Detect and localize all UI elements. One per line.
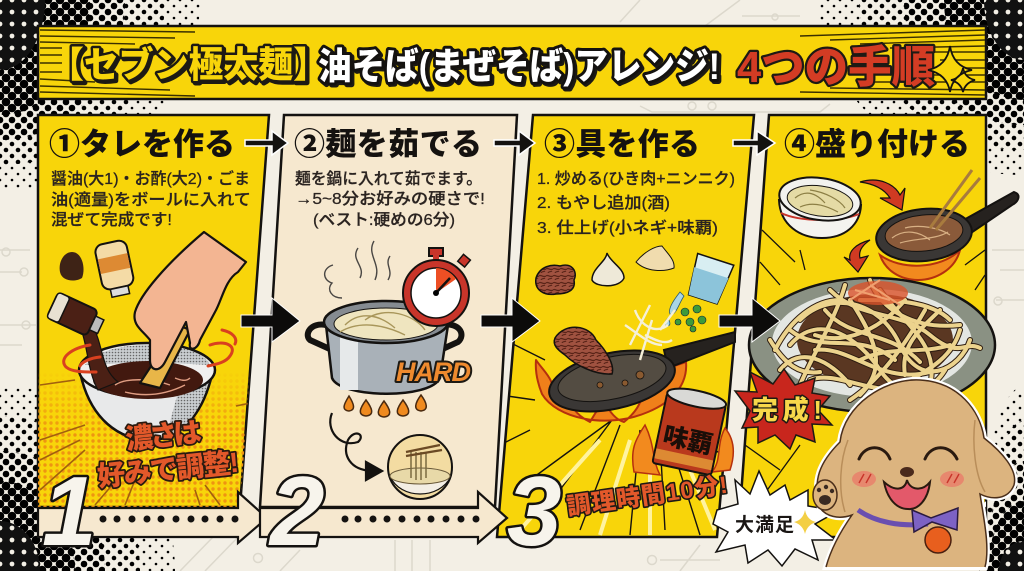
dog collar and bow (858, 510, 928, 525)
panel 3: make toppings (497, 115, 754, 537)
panel 4: plate up (713, 115, 1018, 566)
icon: hand with spatula (134, 232, 246, 388)
arrow band 2 to 3 (260, 492, 507, 543)
icon: burner flames (344, 395, 426, 417)
icon: garlic (592, 253, 624, 286)
text: step 1 description: 油(適量)をボールに入れて (51, 191, 251, 209)
icon: chestnut seed (60, 252, 84, 280)
text: step 2 description: (ベスト:硬めの6分) (313, 211, 455, 229)
callout: done burst: 完成! (752, 395, 822, 425)
text: step 3 description: 1. 炒める(ひき肉+ニンニク) (537, 170, 735, 188)
dog nose (900, 467, 914, 477)
icon: red swirl motion lines (64, 330, 236, 372)
mascot: smiling dog (813, 380, 1015, 567)
icon: flames under pan (536, 360, 686, 422)
callout: adjust thickness: 濃さは (124, 416, 203, 455)
arrow: curled arrow to bowl (330, 413, 382, 480)
icon: noodle bowl (776, 172, 864, 238)
icon: plate of mazesoba (749, 278, 995, 412)
dog mouth (884, 480, 930, 509)
arrow: heading 3 to 4 (733, 131, 775, 155)
callout: done burst (735, 369, 832, 449)
icon: weiba seasoning can: 味覇 (660, 422, 715, 460)
text: step 2 description (295, 170, 485, 229)
icon: steam (325, 241, 390, 298)
text: step 1 description (51, 170, 251, 229)
numeral 1: 1 (42, 456, 97, 566)
icon: glass of water (685, 254, 734, 305)
title part: abura soba arrange: 油そば(まぜそば)アレンジ! (318, 46, 720, 87)
text: step 3 description: 2. もやし追加(酒) (537, 194, 670, 212)
heading: step 4: ④盛り付ける (784, 127, 970, 162)
callout: very satisfied burst (713, 471, 838, 566)
icon: ground meat (536, 265, 575, 294)
title banner (38, 26, 986, 99)
panel 1: make the sauce (38, 115, 278, 510)
icon: mixing bowl (79, 343, 215, 440)
text: step 2 description: →5~8分お好みの硬さで! (295, 190, 485, 208)
text: step 2 description: 麺を鍋に入れて茹でます。 (295, 170, 482, 188)
title part: seven extra thick noodles: 【セブン極太麺】 (49, 44, 328, 85)
heading: step 2: ②麺を茹でる (294, 127, 482, 162)
arrow: large step 2 to 3 (481, 298, 540, 342)
arrow band 1 to 2 (38, 492, 267, 543)
icon: green onions (675, 305, 706, 332)
text: step 1 description: 混ぜて完成です! (51, 211, 172, 229)
label: HARD: HARD (396, 357, 471, 387)
numeral 2: 2 (268, 456, 325, 566)
heading: step 3: ③具を作る (544, 127, 700, 162)
icon: stopwatch (403, 248, 470, 326)
title part: four steps: 4つの手順 (737, 43, 935, 92)
dog paw (813, 480, 837, 510)
text: step 3 description (537, 170, 735, 237)
text: step 3 description: 3. 仕上げ(小ネギ+味覇) (537, 219, 718, 237)
text: step 1 description: 醤油(大1)・お酢(大2)・ごま (51, 170, 250, 188)
icon: pan with noodles and chopsticks (874, 170, 1018, 280)
arrow: heading 1 to 2 (245, 131, 288, 155)
icon: bean sprouts (625, 305, 675, 360)
callout: cooking time 10 minutes: 調理時間10分! (565, 472, 729, 521)
icon: sparkles (928, 46, 975, 92)
numeral 3: 3 (507, 456, 562, 566)
callout: adjust thickness (92, 413, 240, 492)
dog cheeks (852, 471, 964, 487)
icon: powder pile (636, 246, 674, 270)
arrow: heading 2 to 3 (494, 131, 535, 155)
arrow: large step 3 to 4 (719, 298, 780, 342)
icon: small sparkle (794, 510, 816, 534)
icon: frying pan (544, 332, 735, 422)
arrow: red curved arrows (844, 180, 905, 272)
icon: weiba seasoning can (652, 385, 728, 475)
callout: very satisfied burst: 大満足 (735, 514, 794, 536)
icon: pot of noodles (308, 301, 461, 394)
arrow: large step 1 to 2 (241, 298, 300, 342)
heading: step 1: ①タレを作る (49, 127, 235, 162)
dog tag (925, 527, 951, 553)
icon: small noodle bowl (388, 435, 452, 499)
icon: flames behind can (633, 425, 733, 475)
dog ears shading (841, 420, 985, 512)
panel 2: boil noodles (260, 115, 517, 507)
dog blush marks (859, 474, 959, 483)
icon: soy sauce bottle and stream (47, 292, 118, 390)
icon: meat in pan (554, 327, 613, 374)
dog eyes (859, 448, 957, 459)
icon: orange bottle (94, 239, 136, 299)
callout: adjust thickness: 好みで調整! (96, 447, 240, 492)
